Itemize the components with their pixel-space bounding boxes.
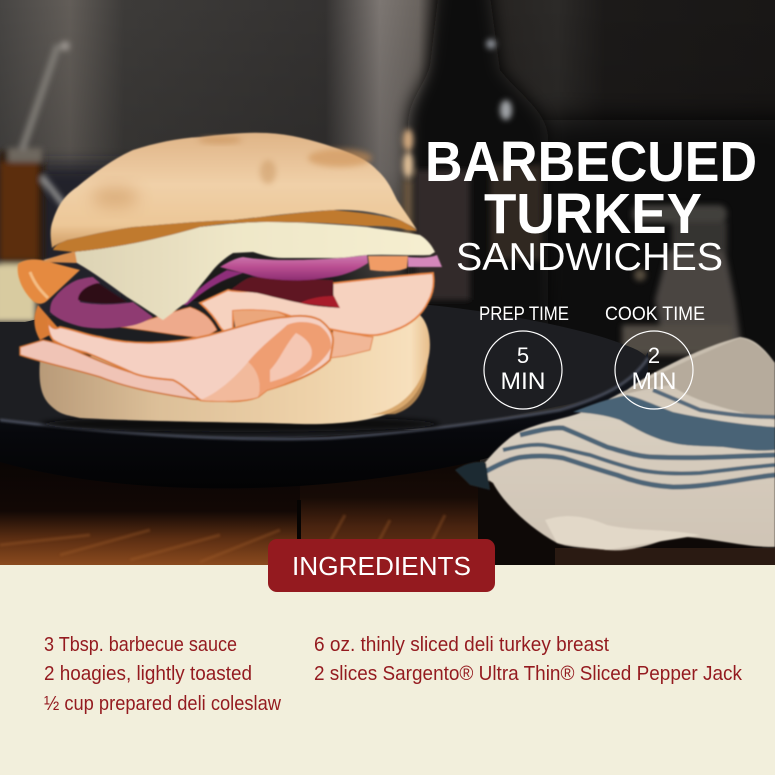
ingredients badge: INGREDIENTS: [292, 551, 471, 581]
napkin: [455, 337, 775, 550]
upper turkey slice: [200, 273, 434, 337]
title: [425, 130, 757, 246]
bottle details: [403, 39, 542, 300]
prep time: PREP TIME: [479, 304, 569, 325]
wood table: [0, 430, 775, 565]
bun shadow band: [53, 210, 417, 252]
panel: hero photo: [0, 0, 775, 565]
top bun: [51, 133, 417, 248]
sandwich: [18, 133, 442, 424]
ingredients list right: 6 oz. thinly sliced deli turkey breast: [314, 634, 609, 656]
prep time: MIN: [500, 368, 546, 395]
right red onion: [408, 255, 442, 267]
plate: [0, 300, 648, 488]
cook time: COOK TIME: [605, 304, 705, 325]
jar and spoon: [0, 41, 70, 322]
ingredients list right: [314, 634, 743, 685]
ingredients list left: [44, 634, 282, 715]
prep time: 5: [517, 343, 529, 368]
subtitle: SANDWICHES: [456, 236, 723, 279]
prep time: [479, 304, 569, 409]
panel: ingredients background: [0, 565, 775, 775]
cook time: [605, 304, 705, 409]
barbecue sauce: [230, 277, 340, 308]
back turkey slice: [330, 330, 373, 358]
ingredients list left: ½ cup prepared deli coleslaw: [44, 693, 282, 715]
ingredients badge: [268, 539, 495, 592]
bottle: [408, 0, 548, 340]
red onion left ring: [50, 277, 153, 328]
salt shaker: [622, 205, 742, 355]
big middle turkey slice: [48, 316, 333, 401]
ingredients list left: 2 hoagies, lightly toasted: [44, 663, 252, 685]
center small fold: [120, 307, 217, 338]
cook time: MIN: [632, 368, 676, 395]
ingredients list right: 2 slices Sargento® Ultra Thin® Sliced Pepper Jack: [314, 663, 743, 685]
red onion arc: [220, 255, 368, 280]
red onion center piece: [183, 270, 243, 305]
ingredients list left: 3 Tbsp. barbecue sauce: [44, 634, 237, 656]
cheese slice: [43, 222, 435, 320]
title: TURKEY: [484, 182, 702, 246]
cook time: 2: [648, 343, 660, 368]
bottom bun: [39, 315, 430, 424]
left orange curl: [18, 259, 80, 304]
lower turkey slice: [18, 338, 199, 401]
